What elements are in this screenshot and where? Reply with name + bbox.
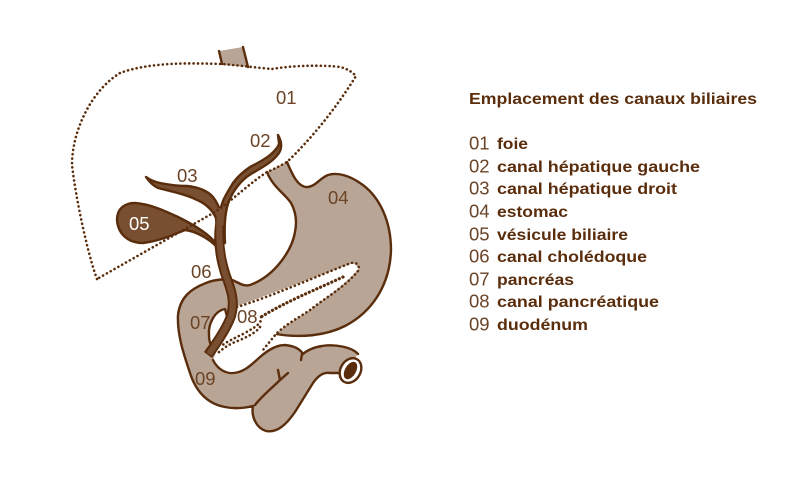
legend item 07: pancréas (497, 272, 574, 289)
esophagus walls (219, 47, 248, 67)
legend item 01: 01 (469, 132, 490, 154)
legend item 07 (469, 268, 574, 290)
legend item 04: 04 (469, 200, 490, 222)
legend item 09: duodénum (497, 317, 588, 334)
legend item 04: estomac (497, 204, 568, 221)
stomach and duodenum fill (178, 162, 391, 431)
label 03: 03 (177, 165, 198, 186)
label 04: 04 (328, 187, 349, 208)
label 01: 01 (276, 87, 297, 108)
legend item 01 (469, 132, 528, 154)
liver dotted outline (72, 63, 356, 279)
hepatic ducts (146, 135, 281, 243)
legend item 08: 08 (469, 290, 490, 312)
legend item 05: vésicule biliaire (497, 227, 628, 244)
legend item 08 (469, 290, 659, 312)
legend item 03: canal hépatique droit (497, 181, 678, 198)
legend item 05: 05 (469, 224, 490, 244)
outer ring (335, 354, 366, 387)
legend item 07: 07 (469, 268, 490, 290)
pancreas dotted outline (237, 263, 359, 350)
anatomical diagram (72, 47, 391, 431)
hole next to pancreas head (209, 309, 228, 347)
duodenum fold marks (255, 354, 302, 405)
gallbladder (117, 203, 216, 246)
legend item 06 (469, 246, 647, 266)
common bile duct outline (208, 225, 233, 355)
legend item 01: foie (497, 136, 528, 153)
label 07: 07 (190, 312, 211, 333)
label 05: 05 (129, 213, 150, 234)
legend item 08: canal pancréatique (497, 294, 659, 311)
legend item 03 (469, 178, 678, 198)
duodenum opening (335, 354, 366, 387)
diagram number labels (129, 87, 349, 389)
esophagus (219, 47, 248, 67)
legend item 09 (469, 314, 588, 334)
common bile duct core (209, 208, 233, 354)
esophagus fill (219, 47, 248, 67)
legend item 02: 02 (469, 156, 490, 176)
pancreatic duct (217, 277, 343, 354)
duct upper branch (220, 317, 261, 347)
duct lower branch (217, 327, 260, 354)
label 02: 02 (250, 130, 271, 151)
bile ducts (146, 135, 281, 355)
inner lumen (341, 360, 360, 381)
label 08: 08 (237, 306, 258, 327)
legend item 03: 03 (469, 178, 490, 198)
main duct (261, 277, 343, 317)
legend (469, 91, 757, 334)
legend item 04 (469, 200, 568, 222)
legend item 06: canal cholédoque (497, 249, 647, 266)
label 06: 06 (191, 261, 212, 282)
legend item 09: 09 (469, 314, 490, 334)
legend item 02 (469, 156, 700, 176)
white pancreas area (216, 263, 359, 372)
stomach outline (276, 162, 391, 336)
label 09: 09 (195, 368, 216, 389)
legend title: Emplacement des canaux biliaires (469, 91, 757, 108)
legend item 02: canal hépatique gauche (497, 159, 700, 176)
legend item 05 (469, 224, 628, 244)
stomach inner curve and duodenum outline (178, 172, 358, 431)
legend item 06: 06 (469, 246, 490, 266)
